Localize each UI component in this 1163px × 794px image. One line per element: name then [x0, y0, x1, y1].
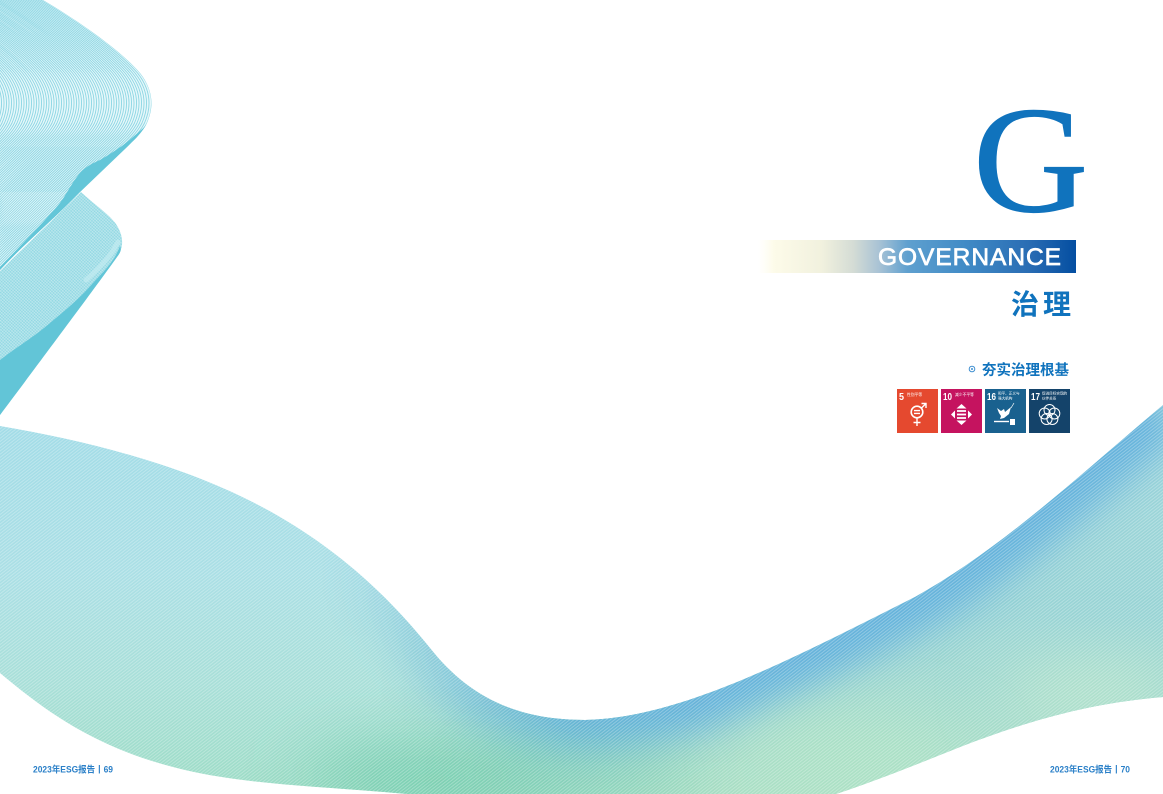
icon: sdg 10 reduced inequalities: 减少不平等	[955, 392, 974, 397]
governance gradient banner: GOVERNANCE	[878, 244, 1061, 271]
icon: sdg 16 peace and justice: 强大机构	[998, 396, 1013, 400]
icon: sdg 17 partnerships: 伙伴关系	[1042, 396, 1057, 400]
upper left ribbon wave	[0, 0, 151, 300]
icon: sdg 16 peace and justice: 和平、正义与	[998, 390, 1020, 396]
main bottom flowing wave	[0, 405, 1163, 794]
big letter G: G	[973, 75, 1088, 244]
icon: sdg 17 partnerships	[1029, 389, 1070, 433]
footer right page number: 2023年ESG报告丨70	[1050, 764, 1130, 774]
icon: sdg 5 gender equality	[897, 389, 938, 433]
icon: sdg 17 partnerships: 17	[1031, 392, 1040, 403]
lower left ribbon wave	[0, 192, 122, 415]
sdg goal icons row	[897, 389, 1070, 433]
icon: sdg 17 partnerships: 促进目标实现的	[1042, 390, 1068, 396]
icon: sdg 16 peace and justice	[985, 389, 1026, 433]
footer left page number: 2023年ESG报告丨69	[33, 764, 113, 774]
icon: sdg 5 gender equality: 5	[899, 392, 904, 403]
sub heading with bullet: 夯实治理根基	[982, 361, 1069, 379]
icon: sdg 16 peace and justice: 16	[987, 392, 996, 403]
icon: sdg 5 gender equality: 性别平等	[907, 392, 922, 397]
governance gradient banner	[758, 240, 1076, 273]
icon: sdg 10 reduced inequalities	[941, 389, 982, 433]
chinese heading: 治理	[1011, 289, 1075, 320]
icon: sdg 10 reduced inequalities: 10	[943, 392, 952, 403]
